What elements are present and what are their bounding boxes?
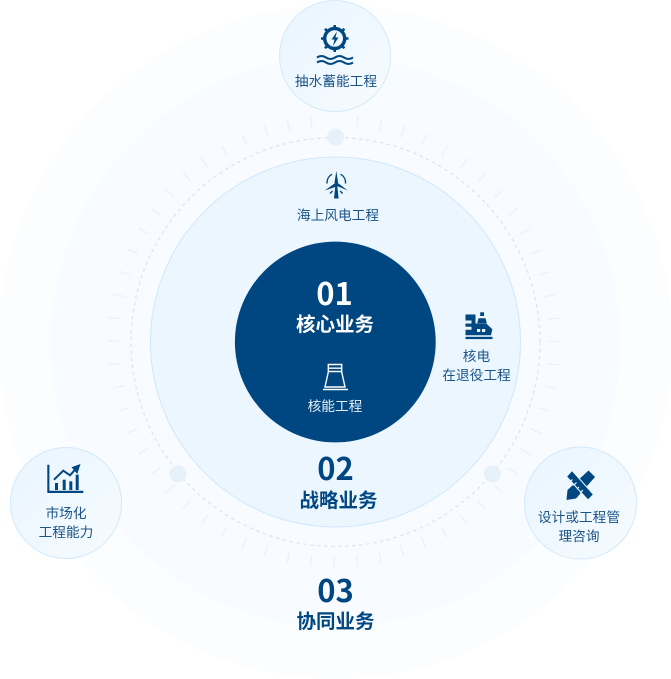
label: nuclear decommissioning: 核电 — [463, 344, 490, 364]
heading: strategic number: 02 — [317, 444, 354, 489]
icon: pencil and ruler — [566, 470, 595, 500]
label: market engineering capability: 工程能力 — [39, 520, 93, 540]
middle ring — [50, 57, 620, 627]
icon: wind turbine — [325, 171, 348, 198]
heading: core business: 核心业务 — [296, 308, 374, 337]
label: design and consulting: 设计或工程管 — [538, 506, 620, 526]
dashed ring — [131, 138, 540, 546]
icon: cooling tower — [323, 364, 348, 390]
node circle: consulting — [524, 447, 636, 559]
label: design and consulting: 理咨询 — [558, 525, 600, 545]
node circle: market engineering — [10, 448, 122, 558]
icon: decommissioning plant — [466, 312, 492, 339]
label: nuclear decommissioning: 在退役工程 — [442, 364, 511, 384]
node circle: pumped storage — [280, 0, 390, 112]
label: nuclear decommissioning — [442, 344, 511, 384]
label: nuclear engineering: 核能工程 — [308, 395, 362, 415]
label: market engineering capability — [39, 502, 93, 540]
tick ring — [114, 121, 555, 562]
heading: collaborative number: 03 — [317, 566, 354, 611]
label: pumped storage engineering: 抽水蓄能工程 — [295, 70, 377, 90]
icon: growth chart — [47, 464, 83, 493]
icon: pumped storage — [317, 25, 353, 64]
strategic business circle — [150, 157, 520, 527]
heading: core number: 01 — [316, 268, 353, 314]
label: market engineering capability: 市场化 — [45, 502, 87, 522]
label: design and consulting — [538, 506, 620, 545]
ring node dots — [170, 128, 501, 482]
core business circle — [235, 242, 436, 442]
heading: strategic business: 战略业务 — [299, 484, 378, 512]
label: offshore wind engineering: 海上风电工程 — [297, 204, 379, 224]
tick gap above top node — [330, 113, 340, 131]
heading: collaborative business: 协同业务 — [296, 605, 374, 634]
